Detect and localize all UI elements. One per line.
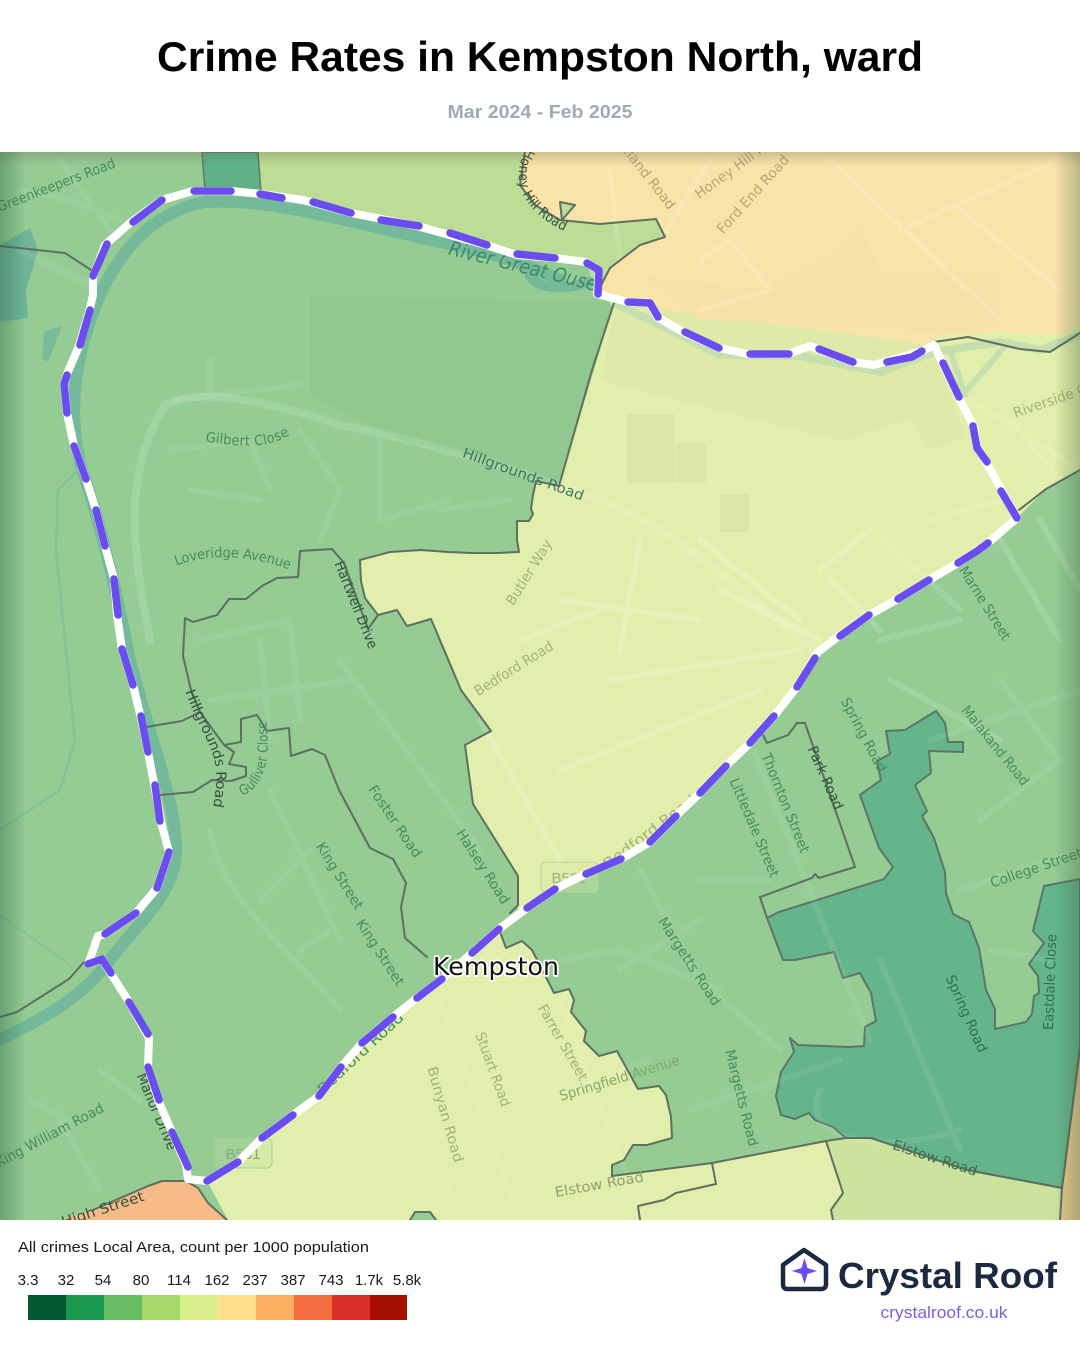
label: Hartwell Drive: Hartwell Drive: [331, 559, 380, 651]
label: Eastdale Close: Eastdale Close: [1041, 934, 1060, 1030]
label: Kempston place name: Kempston: [433, 952, 559, 981]
badge: B531 west: B531: [225, 1146, 261, 1163]
legend scale labels: 32: [58, 1272, 74, 1289]
area boundaries: [0, 152, 1080, 1220]
label: Marne Street: Marne Street: [955, 564, 1014, 644]
ward boundary: [64, 191, 1017, 1181]
label: Butler Way: Butler Way: [503, 537, 556, 608]
label: Bunyan Road: Bunyan Road: [423, 1065, 466, 1164]
legend scale labels: 54: [95, 1272, 111, 1289]
area: dark green strip at top: [202, 152, 261, 193]
label: Stuart Road: Stuart Road: [471, 1030, 513, 1109]
label: Foster Road: Foster Road: [364, 783, 425, 861]
boundary purple dashes: [64, 191, 1017, 1181]
label: Honey Hill Road west: Honey Hill Road: [516, 152, 568, 231]
label: Spring Road south: Spring Road: [942, 973, 990, 1055]
area: tan east corner: [1061, 1058, 1080, 1220]
label: King Street lower: King Street: [352, 917, 407, 990]
label: Bedford Road south west: Bedford Road: [315, 1010, 407, 1098]
label: Ford End Road: Ford End Road: [714, 152, 793, 237]
badge: B531 centre: B531: [551, 870, 587, 887]
website url: crystalroof.co.uk: [880, 1304, 1008, 1322]
area: light green south east: [826, 1138, 1062, 1220]
label: Thornton Street: Thornton Street: [757, 750, 812, 856]
label: Margetts Road: Margetts Road: [654, 915, 723, 1009]
legend scale labels: 387: [280, 1272, 306, 1289]
legend scale labels: 743: [318, 1272, 344, 1289]
label: Elstow Road west: Elstow Road: [554, 1169, 645, 1201]
label: High Street: High Street: [60, 1189, 147, 1231]
label: Park Road: Park Road: [804, 744, 846, 812]
label: Littledale Street: Littledale Street: [726, 776, 782, 880]
map texture: parks and fields: [575, 308, 926, 532]
street network: [20, 150, 1080, 1220]
label: Hillgrounds Road north: Hillgrounds Road: [460, 445, 586, 504]
legend colour swatches: [28, 1295, 407, 1320]
label: Gulliver Close: Gulliver Close: [240, 722, 268, 794]
label: Gilbert Close: Gilbert Close: [206, 429, 289, 446]
boundary white casing: [64, 191, 1017, 1181]
label: Manor Drive: Manor Drive: [133, 1071, 179, 1153]
label: Malakand Road: Malakand Road: [958, 703, 1032, 789]
legend scale labels: 114: [167, 1272, 191, 1289]
area: pale yellow central: [360, 300, 1080, 915]
label: Margetts Road lower: Margetts Road: [721, 1048, 761, 1148]
logo: Crystal Roof: [783, 1250, 1058, 1322]
river and ponds: [0, 202, 1080, 1042]
area: orange south west: [60, 1181, 227, 1220]
label: Honey Hill Road: Honey Hill Road: [692, 126, 789, 202]
label: Loveridge Avenue: Loveridge Avenue: [174, 546, 290, 569]
road badges: [215, 862, 598, 1168]
icon: house with star: [783, 1250, 826, 1289]
legend scale labels: 5.8k: [393, 1272, 422, 1289]
subtitle: Mar 2024 - Feb 2025: [448, 102, 632, 122]
label: Hillgrounds Road south: Hillgrounds Road: [186, 689, 226, 808]
legend scale labels: 1.7k: [355, 1272, 384, 1289]
title: Crime Rates in Kempston North, ward: [157, 33, 923, 80]
label: Bedford Road north: Bedford Road: [472, 639, 557, 700]
label: Ireland Road: Ireland Road: [612, 134, 678, 213]
map edge shading: [0, 152, 1080, 1220]
badge: B531 west: [215, 1138, 272, 1168]
legend scale labels: 80: [133, 1272, 149, 1289]
area: light green north of river: [258, 152, 664, 280]
legend scale labels: 162: [204, 1272, 230, 1289]
legend scale labels: [18, 1272, 422, 1289]
legend scale labels: 237: [242, 1272, 268, 1289]
label: Halsey Road: Halsey Road: [452, 827, 513, 907]
area: dark green south east: [767, 711, 1080, 1188]
badge: B531 centre: [541, 862, 598, 892]
label: Springfield Avenue: Springfield Avenue: [558, 1053, 682, 1105]
label: Bedford Road centre: Bedford Road: [600, 792, 699, 872]
label: Elstow Road east: Elstow Road: [891, 1137, 979, 1180]
wordmark: Crystal Roof: [838, 1255, 1058, 1296]
base layer: medium green area: [0, 152, 1080, 1220]
label: King Street: King Street: [312, 840, 366, 913]
label: Spring Road north: Spring Road: [837, 695, 890, 775]
label: River Great Ouse: River Great Ouse: [446, 236, 600, 296]
area: peach north: [521, 152, 1080, 344]
area: pale yellow south: [207, 929, 843, 1220]
label: Farrer Street: Farrer Street: [534, 1002, 591, 1084]
legend title: All crimes Local Area, count per 1000 population: [18, 1239, 369, 1256]
legend scale labels: 3.3: [18, 1272, 38, 1289]
legend: [18, 1239, 422, 1320]
